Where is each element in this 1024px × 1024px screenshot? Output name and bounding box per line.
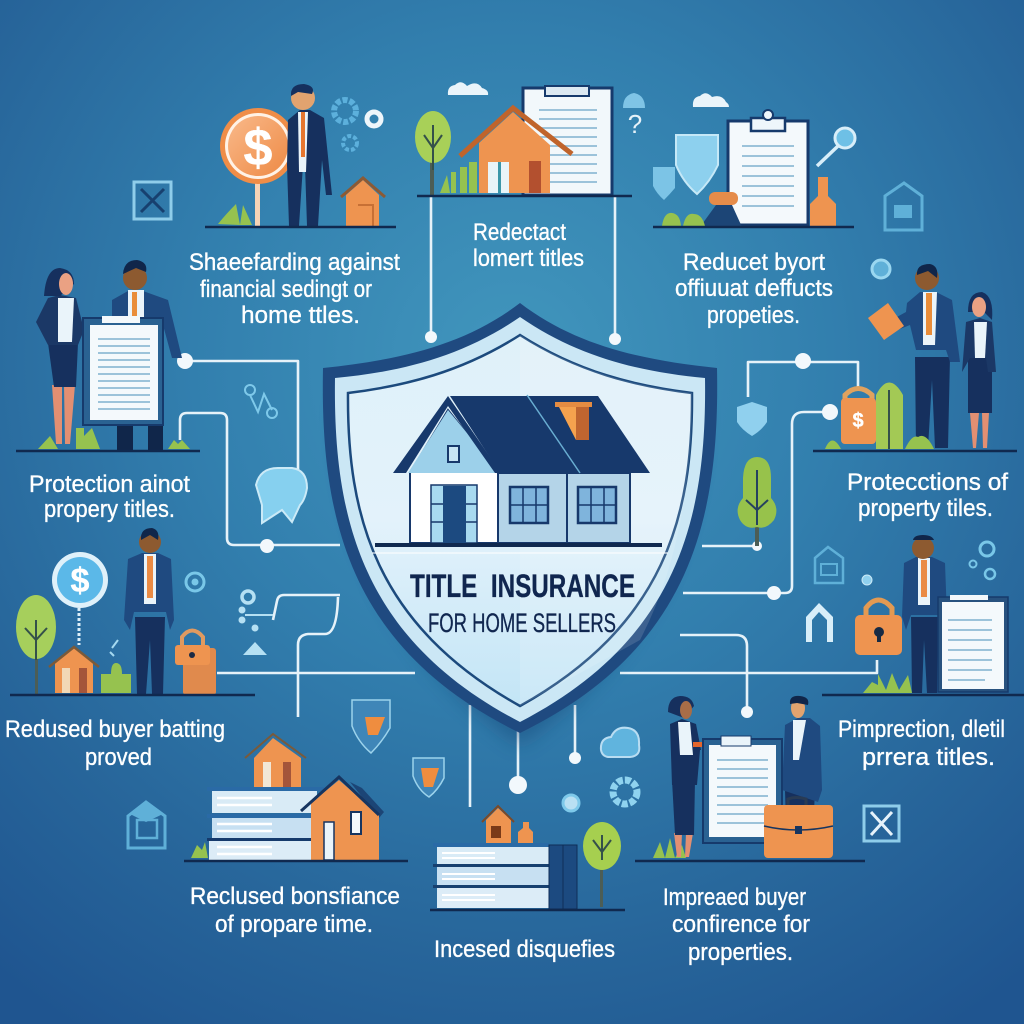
icon: bottle (810, 177, 836, 227)
heading: protection left: Protection ainot (29, 471, 190, 498)
panel: top right clipboard (653, 93, 855, 227)
heading: reduced buyer (5, 716, 225, 771)
heading: safeguarding (189, 249, 400, 329)
heading: redectact (473, 219, 584, 272)
heading: reducet (675, 249, 833, 329)
heading: redectact: Redectact (473, 219, 566, 246)
heading: impreaed: confirence for (672, 911, 810, 938)
heading: reducet: offiuuat deffucts (675, 275, 833, 302)
icon: percent marks (245, 385, 277, 418)
icon: dollar sign coin: $ (244, 119, 273, 177)
icon: tree (583, 822, 621, 907)
panel: left dollar person (10, 528, 255, 695)
person (287, 84, 332, 226)
title (410, 568, 635, 638)
icon: cloud (601, 728, 639, 757)
icon: tiny house (482, 806, 514, 843)
icon: tree (415, 111, 451, 195)
cloud (693, 93, 729, 107)
icon: document (938, 595, 1008, 692)
heading: protection right (847, 469, 1008, 522)
panel: bottom right people (635, 696, 865, 861)
icon: tree (16, 595, 56, 695)
icon: padlock (175, 630, 216, 695)
bushes (662, 213, 705, 226)
icon: clipboard (703, 736, 782, 843)
panel: bottom left houses and books (184, 734, 408, 861)
icon: question lamp: ? (628, 109, 642, 139)
heading: protection left (29, 471, 190, 523)
title: FOR HOME SELLERS (428, 608, 616, 638)
icon: bottle (518, 822, 533, 843)
person: woman (668, 696, 707, 857)
icon: x box bottom right (864, 806, 899, 841)
person: woman (36, 268, 84, 444)
heading: incesed: Incesed disquefies (434, 936, 615, 963)
icon: dollar sign coin (220, 108, 296, 228)
icon: main house (372, 395, 668, 553)
icon: speech bubble (256, 468, 307, 523)
heading: reduced buyer: proved (85, 744, 152, 771)
icon: swirls (970, 542, 995, 579)
panel: left people with document (16, 260, 200, 451)
icon: rear house (245, 734, 306, 787)
icon: padlock (855, 600, 902, 655)
icon: dollar circle (52, 552, 108, 645)
panel: safeguarding against financial (205, 84, 396, 228)
icon: house (49, 647, 99, 693)
heading: safeguarding: financial sedingt or (200, 276, 372, 303)
heading: protection right: Protecctions of (847, 469, 1008, 496)
icon: gear circle left (186, 573, 204, 591)
shield (323, 303, 717, 733)
person (902, 535, 947, 693)
panel: right padlock and document (806, 535, 1024, 695)
title: TITLE INSURANCE (410, 568, 635, 604)
heading: impreaed (663, 884, 810, 966)
heading: pimprection: Pimprection, dletil (838, 716, 1005, 743)
bushes (825, 436, 934, 449)
person: man (782, 696, 822, 855)
icon: orange book (868, 303, 904, 340)
heading: protection left: propery titles. (44, 496, 175, 523)
heading: protection right: property tiles. (858, 495, 993, 522)
icon: house outline bottom left (128, 802, 165, 848)
heading: reclused (190, 883, 400, 938)
icon: house outline (815, 547, 843, 583)
icon: shield (676, 135, 718, 194)
icon: magnifier (817, 128, 855, 166)
icon: question lamp (623, 93, 645, 139)
heading: safeguarding: home ttles. (241, 302, 360, 329)
heading: reclused: Reclused bonsfiance (190, 883, 400, 910)
icon: small house (341, 178, 385, 226)
icon: clipboard (523, 86, 612, 195)
cloud (448, 82, 488, 95)
grass (653, 838, 686, 858)
heading: pimprection: prrera titles. (862, 744, 995, 771)
connector lines (177, 196, 877, 807)
icon: stamp (700, 192, 742, 227)
icon: dollar circle: $ (71, 562, 90, 600)
icon: gear (613, 780, 637, 804)
heading: pimprection (838, 716, 1005, 771)
icon: book stack (207, 787, 324, 860)
icon: tree (876, 382, 903, 449)
icon: orange padlock (841, 388, 876, 444)
icon: x box top left (134, 182, 171, 219)
grass (218, 204, 252, 225)
panel: bottom center books (430, 795, 625, 910)
person: woman (962, 292, 996, 448)
icon: chat circle (872, 260, 890, 278)
person: man (112, 260, 182, 450)
person: man (882, 264, 960, 448)
icon: orange padlock: $ (852, 410, 864, 432)
shield shadow (340, 340, 700, 745)
icon: gates (806, 603, 833, 642)
icon: briefcase (764, 798, 833, 858)
icon: orange house (460, 108, 572, 193)
grass (38, 428, 190, 449)
icon: front house (301, 777, 384, 860)
icon: small shield (653, 167, 675, 200)
panel: top house (415, 82, 645, 196)
icon: small shield right (737, 402, 767, 436)
panel: right people (813, 260, 1017, 451)
icon: document (83, 316, 163, 425)
heading: reduced buyer: Redused buyer batting (5, 716, 225, 743)
icon: shield bottom center (413, 758, 444, 797)
heading: safeguarding: Shaeefarding against (189, 249, 400, 276)
icon: small nodes (238, 591, 273, 655)
icon: clipboard (728, 110, 808, 225)
icon: gears (334, 100, 381, 150)
icon: small shield bottom (352, 700, 390, 753)
icon: small tree right (738, 457, 776, 546)
icon: book stack (433, 843, 577, 909)
heading: reducet: propeties. (707, 302, 800, 329)
heading: impreaed: Impreaed buyer (663, 884, 806, 911)
icon: house outline top right (885, 183, 922, 230)
heading: impreaed: properties. (688, 939, 793, 966)
heading: redectact: lomert titles (473, 245, 584, 272)
heading: reducet: Reducet byort (683, 249, 825, 276)
grass bars (440, 162, 477, 193)
heading: reclused: of propare time. (215, 911, 373, 938)
person (124, 528, 174, 694)
